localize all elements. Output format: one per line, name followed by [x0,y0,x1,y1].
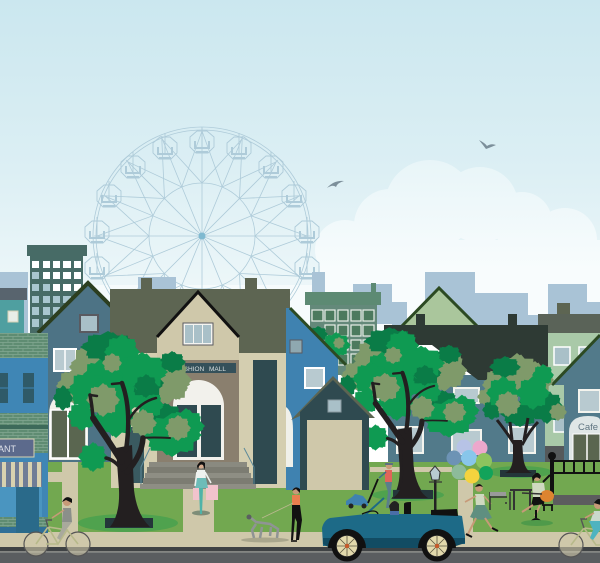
building: garage [291,376,375,490]
building: small teal block [0,288,27,334]
sky [0,0,600,340]
house: blue-grey left house [38,283,112,462]
tree: right small [476,351,568,477]
dog [241,514,289,542]
mall steps [140,448,256,489]
tree: centre right background [337,326,481,499]
tree leaves behind blue roof [307,325,353,359]
car wheels [336,536,448,556]
railing [543,452,600,494]
ground: road [0,547,600,563]
cafe label: Cafe [578,422,598,433]
cyclist left [24,497,90,556]
ground: sidewalk [0,532,600,547]
balloons and balloon string [446,440,493,484]
building: green gable behind dark house [401,288,478,327]
distant skyline [0,272,600,333]
car [322,498,465,562]
building: blue house [286,308,346,490]
building: right green block [538,303,600,462]
guitarist and cafe tables [490,473,554,526]
tree: foreground left [52,329,207,528]
tree plate: centre tree [393,450,433,499]
dog walker [262,487,302,541]
icon: bird [479,140,496,149]
icon: bird [327,181,344,188]
ground: lawn and paths [48,462,600,534]
building: tall apartment tower [27,245,87,336]
building: big dark-roof house [384,314,548,462]
building: fashion mall [110,278,290,489]
mall sign: FASHION MALL [176,366,226,373]
building: restaurant [0,333,48,533]
lower left haze [0,285,320,335]
building: light green apartment [305,283,381,375]
street lamp [429,466,442,510]
cyclist right [559,499,600,557]
lawnmower man [346,463,393,508]
clouds [315,160,600,330]
girl with balloons [465,484,498,537]
ferris wheel [85,127,319,345]
woman shopping [192,462,218,516]
building: right cafe house [552,335,600,495]
